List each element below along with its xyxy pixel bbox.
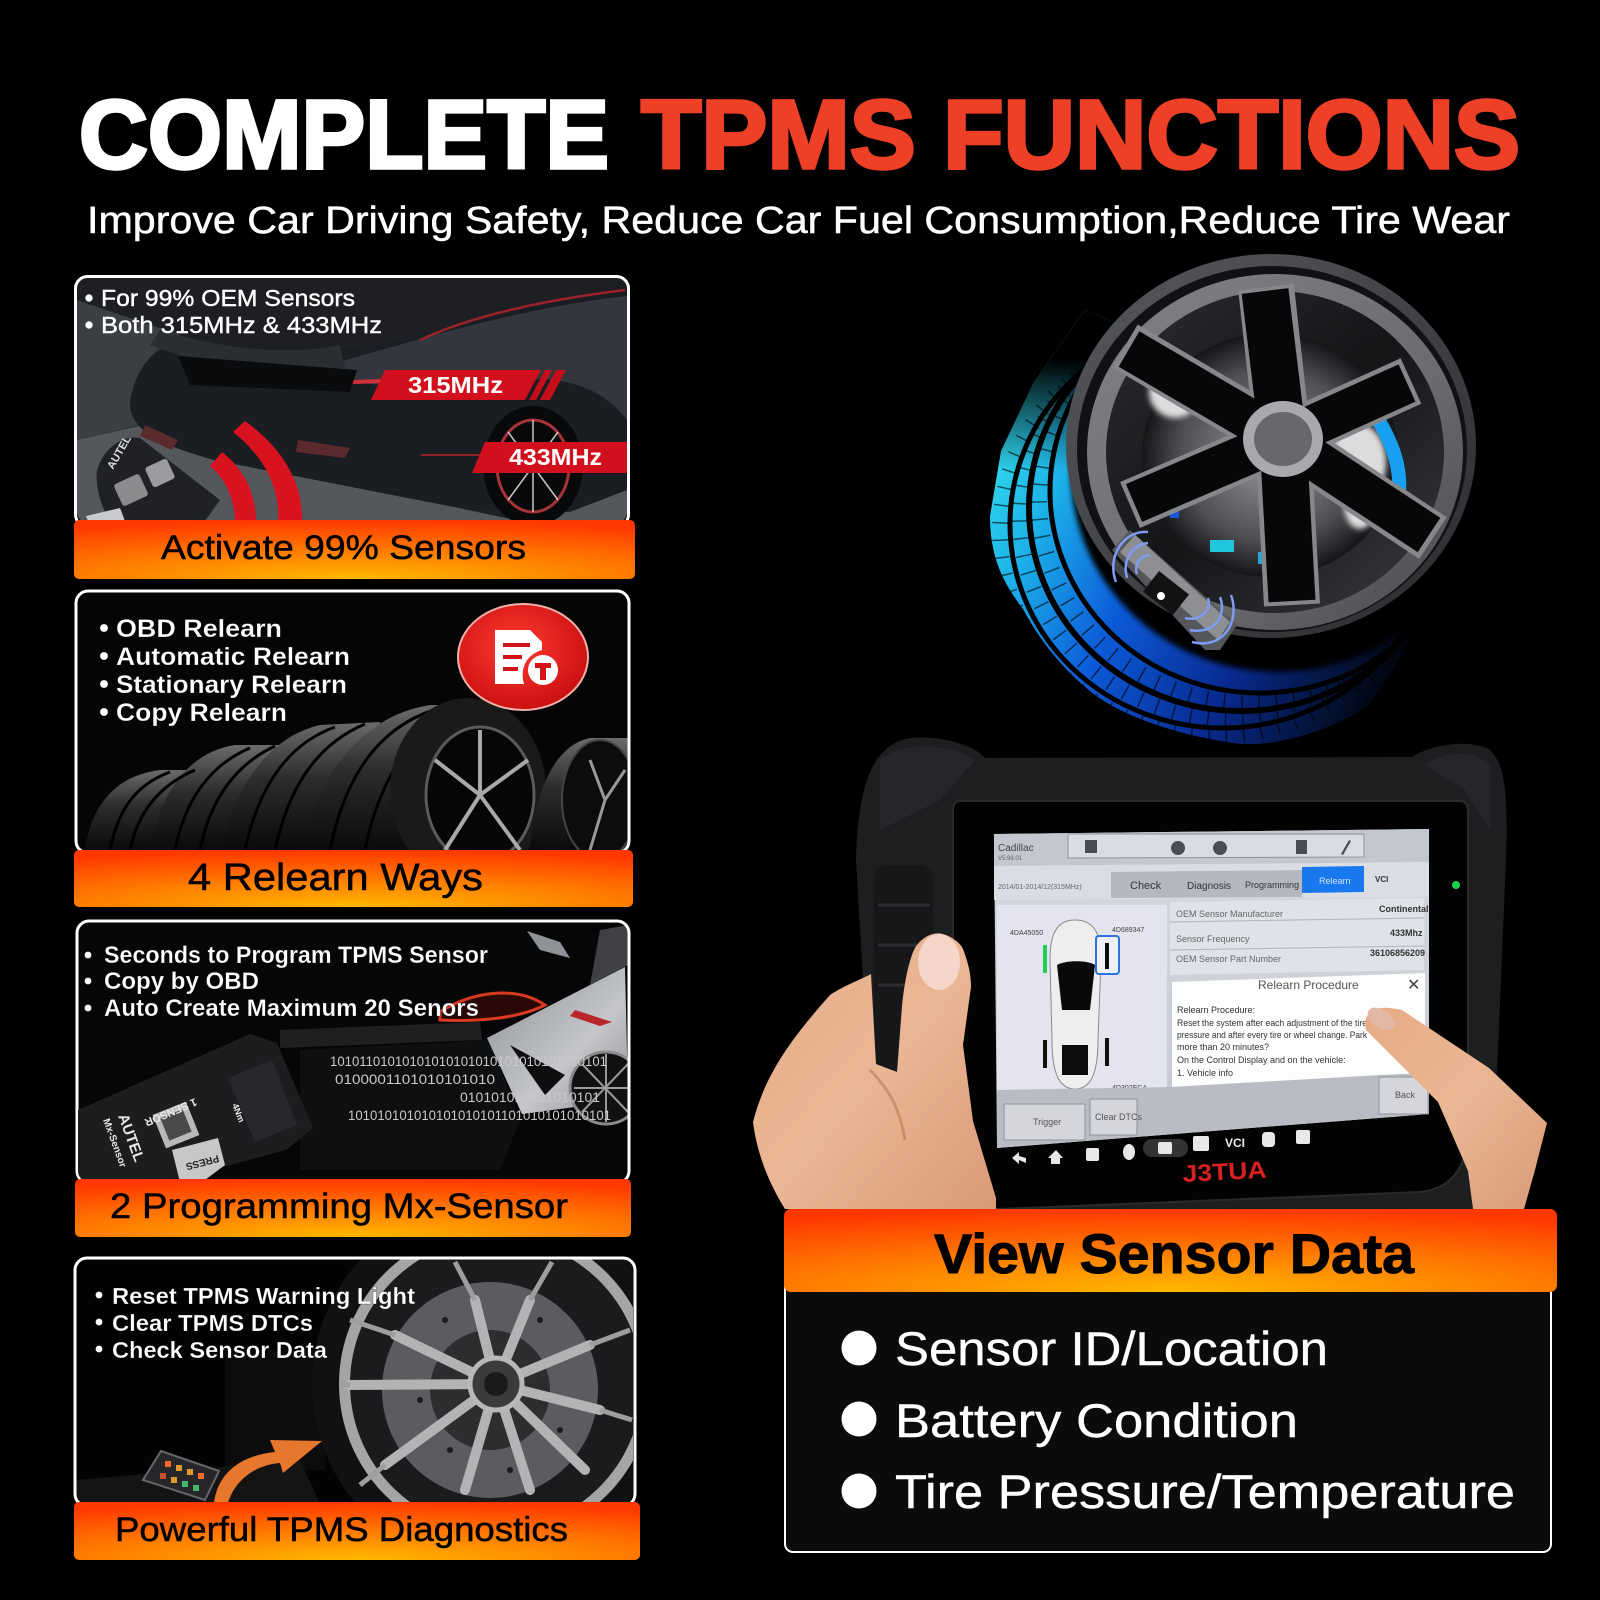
- panel: activate sensors: [76, 276, 628, 526]
- band: relearn ways: [74, 850, 633, 907]
- heading band: View Sensor Data: [934, 1222, 1415, 1285]
- top toolbar: V5.98.01: [998, 856, 1023, 862]
- sensor: 4Nm: [230, 1102, 247, 1124]
- sensor with signal: [1112, 530, 1237, 650]
- bullet text: Copy Relearn: [116, 699, 287, 727]
- 315MHz tag: [371, 370, 566, 400]
- info rows: OEM Sensor Manufacturer: [1176, 909, 1283, 919]
- sensor: 1 SENSOR: [143, 1095, 199, 1128]
- left pane with car: 4DA45050: [1010, 930, 1043, 937]
- subtitle: Improve Car Driving Safety, Reduce Car Fuel Consumption,Reduce Tire Wear: [87, 200, 1510, 242]
- band: programming: 2 Programming Mx-Sensor: [110, 1187, 568, 1226]
- info rows: OEM Sensor Part Number: [1176, 954, 1281, 964]
- rugged body: [856, 737, 1507, 1209]
- binary stream: 0100001101010101010: [335, 1071, 495, 1087]
- band: relearn ways: 4 Relearn Ways: [188, 857, 483, 899]
- list: pressure: Tire Pressure/Temperature: [895, 1465, 1515, 1518]
- left hand: [753, 933, 996, 1209]
- brake disc: [1142, 333, 1398, 577]
- sidewall: [1066, 254, 1476, 638]
- bottom buttons: Trigger: [1033, 1117, 1061, 1127]
- sensor: [78, 1034, 313, 1182]
- relearn popup: Relearn Procedure:: [1177, 1005, 1255, 1015]
- frame: [76, 276, 628, 526]
- signal arcs: [210, 421, 302, 521]
- right hand: [1364, 1003, 1547, 1209]
- heading band: [784, 1209, 1557, 1292]
- relearn popup: ✕: [1407, 977, 1420, 994]
- tablet device: [856, 737, 1507, 1209]
- title: COMPLETE: [79, 80, 609, 189]
- left pane with car: 4D689347: [1112, 927, 1144, 934]
- bullet text: Automatic Relearn: [116, 643, 350, 671]
- top toolbar: [994, 829, 1429, 866]
- binary stream: 101010101010101010101101010101010101: [348, 1107, 611, 1123]
- 315MHz tag: 315MHz: [408, 372, 503, 398]
- panel: diagnostics: [74, 1256, 636, 1503]
- title: TPMS FUNCTIONS: [641, 80, 1520, 189]
- left pane with car: 4D7C3C02: [1012, 1092, 1047, 1099]
- bullet text: Seconds to Program TPMS Sensor: [104, 942, 488, 969]
- band: activate sensors: Activate 99% Sensors: [161, 529, 526, 567]
- bullet text: Clear TPMS DTCs: [112, 1310, 313, 1336]
- frame: [75, 1258, 635, 1506]
- sensor: [86, 434, 220, 521]
- fingernail: [1364, 1003, 1398, 1035]
- sensor: AUTEL: [114, 1112, 147, 1164]
- top toolbar: Cadillac: [998, 843, 1034, 854]
- left pane with car: [997, 905, 1167, 1099]
- band: activate sensors: [74, 520, 635, 579]
- relearn popup: [1172, 973, 1425, 1087]
- tab row: [994, 862, 1429, 900]
- panel: programming: [77, 921, 642, 1183]
- icon: relearn document: [458, 604, 588, 710]
- tire illustration: [985, 254, 1485, 750]
- arrow: [214, 1440, 322, 1503]
- frame: [76, 591, 629, 853]
- title: [79, 80, 1520, 189]
- tread: [990, 310, 1410, 744]
- status led: [1452, 881, 1460, 889]
- tab row: Relearn: [1319, 876, 1351, 886]
- sensor: AUTEL: [105, 434, 134, 472]
- bottom buttons: Clear DTCs: [1095, 1112, 1143, 1122]
- bullet text: [84, 942, 488, 1022]
- car and binary photo scene: [280, 926, 628, 1170]
- bullet text: Check Sensor Data: [112, 1337, 327, 1363]
- bottom buttons: [997, 1073, 1429, 1148]
- relearn popup: Reset the system after each adjustment of the tire: [1177, 1018, 1367, 1028]
- thumbnail: [918, 934, 960, 990]
- left pane with car: 4D302ECA: [1112, 1085, 1147, 1092]
- relearn popup: pressure and after every tire or wheel change. Park: [1177, 1030, 1367, 1040]
- sensor: PRESS: [184, 1152, 220, 1172]
- panel: view sensor data: [784, 1209, 1557, 1552]
- info rows: 36106856209: [1370, 948, 1425, 958]
- nav bar icons: [1012, 1130, 1310, 1164]
- list: sensor id: Sensor ID/Location: [895, 1322, 1328, 1375]
- info rows: Continental: [1379, 904, 1428, 914]
- relearn popup: On the Control Display and on the vehicle:: [1177, 1055, 1346, 1065]
- info rows: Sensor Frequency: [1176, 934, 1250, 944]
- nav bar icons: VCI: [1225, 1136, 1245, 1150]
- relearn popup: Relearn Procedure: [1258, 978, 1359, 992]
- bullet text: [96, 1283, 415, 1363]
- binary stream: 010101010101010101: [460, 1089, 600, 1105]
- bottom buttons: Back: [1395, 1090, 1416, 1100]
- car photo scene: [77, 278, 627, 526]
- sidewall shadow: [1071, 272, 1485, 672]
- tab row: VCI: [1375, 875, 1388, 884]
- grip: [874, 865, 933, 1070]
- tab row: Check: [1130, 880, 1162, 892]
- panel: relearn ways: [74, 590, 630, 850]
- bullet text: Copy by OBD: [104, 968, 259, 995]
- bullet text: OBD Relearn: [116, 615, 282, 643]
- tab row: Programming: [1245, 880, 1299, 890]
- bullet text: Stationary Relearn: [116, 671, 347, 699]
- hub: [1243, 401, 1323, 477]
- info rows: [1170, 898, 1428, 975]
- tires photo scene: [85, 698, 628, 850]
- band: diagnostics: Powerful TPMS Diagnostics: [115, 1511, 568, 1549]
- bullet text: Reset TPMS Warning Light: [112, 1283, 415, 1309]
- info rows: 433Mhz: [1390, 928, 1423, 938]
- wheel photo scene: [76, 1260, 633, 1502]
- rim: [1087, 274, 1463, 630]
- relearn popup: 1. Vehicle info: [1177, 1068, 1233, 1078]
- bullet text: [86, 285, 382, 338]
- brand mark: J3TUA: [1182, 1157, 1267, 1188]
- bullet text: Both 315MHz & 433MHz: [101, 312, 382, 338]
- bullet text: Auto Create Maximum 20 Senors: [104, 995, 479, 1022]
- 433MHz tag: 433MHz: [509, 444, 602, 470]
- mini tablet icon: [143, 1451, 219, 1500]
- band: diagnostics: [74, 1502, 640, 1560]
- tab row: 2014/01-2014/12(315MHz): [998, 884, 1082, 891]
- frame: [77, 921, 629, 1183]
- bullet text: [100, 615, 350, 727]
- 433MHz tag: [421, 442, 627, 473]
- band: programming: [75, 1179, 631, 1237]
- relearn popup: more than 20 minutes?: [1177, 1042, 1269, 1052]
- bezel: [953, 801, 1468, 1209]
- bullet text: For 99% OEM Sensors: [101, 285, 355, 311]
- list: battery: Battery Condition: [895, 1394, 1298, 1447]
- sensor: Mx-Sensor: [100, 1117, 128, 1169]
- screen: [994, 829, 1429, 1148]
- binary stream: [330, 1053, 611, 1123]
- binary stream: 10101101010101010101010101010101010101: [330, 1053, 607, 1069]
- spokes: [1125, 287, 1433, 605]
- tab row: Diagnosis: [1187, 881, 1231, 892]
